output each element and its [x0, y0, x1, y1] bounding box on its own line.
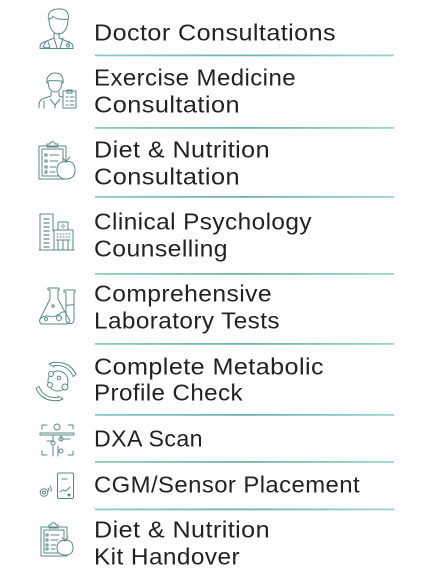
icon: laboratory flask [40, 288, 75, 324]
row 8 label: CGM/Sensor Placement [94, 472, 360, 498]
divider 5 [95, 343, 394, 345]
row 1 label: Doctor Consultations [94, 20, 336, 46]
row 4 label [94, 208, 312, 262]
row 9 label: Kit Handover [94, 544, 240, 570]
icon: diet kit clipboard [41, 523, 73, 556]
row 6 label: Complete Metabolic [94, 354, 324, 380]
divider 8 [95, 508, 394, 510]
row 6 label: Profile Check [94, 380, 243, 406]
row 3 label [94, 136, 270, 190]
divider 6 [95, 414, 394, 416]
row 4 label: Clinical Psychology [94, 208, 312, 234]
row 9 label: Diet & Nutrition [94, 516, 270, 542]
divider 4 [95, 273, 394, 275]
row 2 label: Consultation [94, 92, 240, 118]
row 2 label [94, 64, 296, 118]
row 3 label: Diet & Nutrition [94, 136, 270, 162]
divider 2 [95, 127, 394, 129]
icon: CGM sensor [40, 473, 74, 498]
icon: hospital [39, 214, 74, 250]
divider 7 [95, 461, 394, 463]
icon: metabolic cycle [36, 362, 76, 401]
row 3 label: Consultation [94, 164, 240, 190]
icon: DXA scan [40, 424, 74, 456]
divider 3 [95, 196, 394, 198]
row 5 label [94, 280, 280, 334]
row 5 label: Laboratory Tests [94, 308, 280, 334]
row 7 label: DXA Scan [94, 426, 203, 452]
row 6 label [94, 354, 324, 406]
divider 1 [95, 54, 394, 56]
row 5 label: Comprehensive [94, 280, 272, 306]
row 4 label: Counselling [94, 236, 228, 262]
icon: exercise medicine [39, 73, 76, 108]
icon: doctor [40, 9, 73, 49]
icon: diet clipboard [39, 142, 75, 179]
row 2 label: Exercise Medicine [94, 64, 296, 90]
row 9 label [94, 516, 270, 570]
